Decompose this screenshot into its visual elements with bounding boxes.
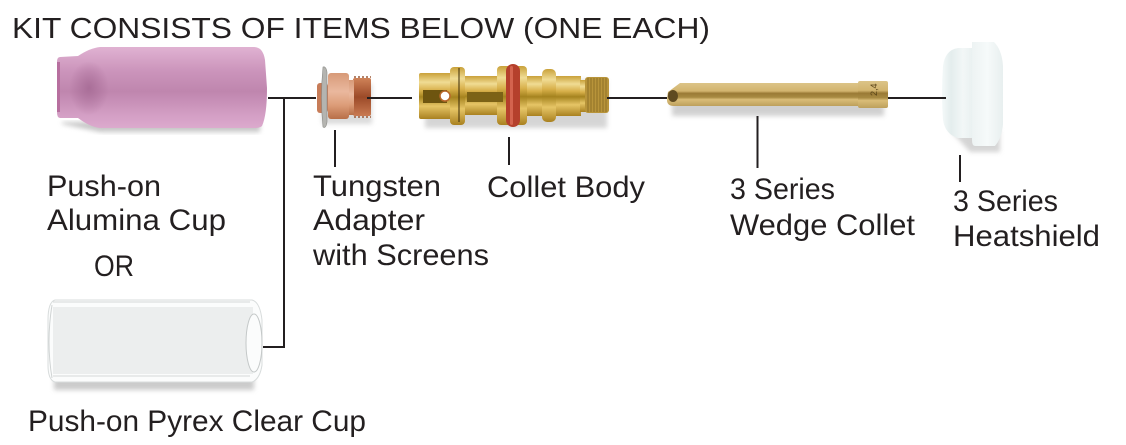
label: tungsten adapter with screens: with Screens bbox=[312, 239, 489, 272]
label: tungsten adapter with screens bbox=[312, 170, 489, 272]
icon: collet body bbox=[419, 64, 609, 128]
label: push-on alumina cup: Alumina Cup bbox=[47, 204, 226, 237]
label: push-on alumina cup: Push-on bbox=[47, 170, 161, 203]
icon: wedge collet: 2,4 bbox=[869, 83, 879, 96]
icon: alumina cup bbox=[57, 47, 267, 132]
label: 3 series wedge collet: Wedge Collet bbox=[730, 209, 916, 242]
label: 3 series heatshield: Heatshield bbox=[953, 220, 1100, 253]
label: collet body: Collet Body bbox=[487, 171, 645, 204]
icon: heatshield bbox=[942, 42, 1003, 152]
label: 3 series heatshield: 3 Series bbox=[953, 185, 1058, 218]
label: 3 series wedge collet bbox=[730, 173, 916, 242]
title: KIT CONSISTS OF ITEMS BELOW (ONE EACH) bbox=[12, 13, 710, 45]
label: or: OR bbox=[94, 250, 134, 283]
icon: pyrex clear cup bbox=[48, 300, 262, 390]
label: 3 series wedge collet: 3 Series bbox=[730, 173, 835, 206]
label: push-on pyrex clear cup: Push-on Pyrex Clear Cup bbox=[28, 405, 366, 438]
label: push-on alumina cup bbox=[47, 170, 226, 237]
label: tungsten adapter with screens: Tungsten bbox=[313, 170, 441, 203]
label: 3 series heatshield bbox=[953, 185, 1100, 253]
icon: tungsten adapter with screens bbox=[317, 67, 372, 127]
icon: wedge collet bbox=[667, 81, 888, 116]
connector lines bbox=[263, 98, 960, 347]
label: tungsten adapter with screens: Adapter bbox=[313, 204, 425, 237]
